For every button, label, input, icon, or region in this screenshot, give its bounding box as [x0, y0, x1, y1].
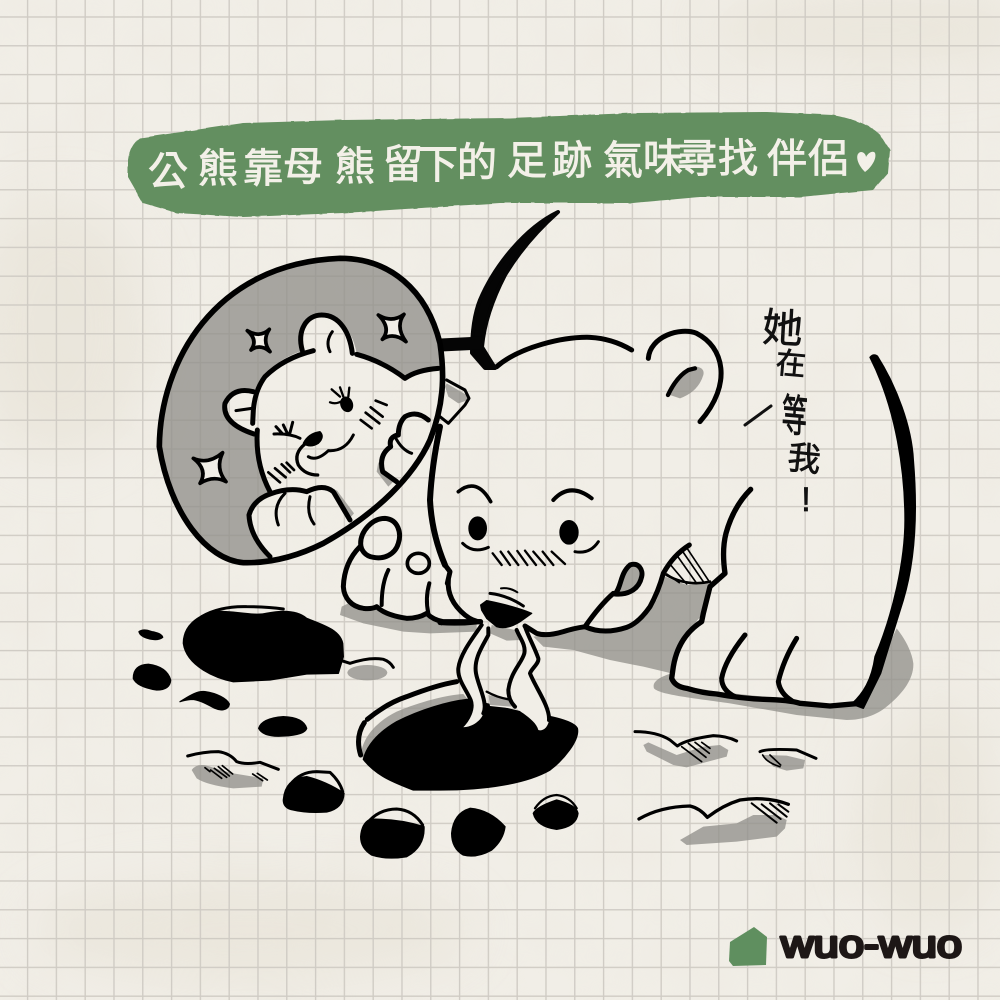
- icon: heart: [857, 152, 875, 172]
- logo wordmark: wuo-wuo: [780, 924, 962, 966]
- speech: she is waiting: 我: [786, 438, 823, 479]
- lens grey background: [159, 258, 441, 563]
- main paw pad: [183, 611, 343, 682]
- head left line: [430, 427, 440, 500]
- scent ribbons: [458, 625, 549, 730]
- logo: [729, 924, 962, 966]
- icon: sparkles: [193, 314, 406, 483]
- handle joint: [445, 383, 468, 403]
- ground mark scribbles: [635, 732, 816, 845]
- icon: green house: [729, 927, 767, 966]
- female bear head: [253, 351, 313, 423]
- shadow under front foot: [340, 603, 477, 633]
- speech dash: [745, 406, 771, 425]
- ground shadows: [533, 577, 913, 720]
- title text: 公熊靠母熊留下的足跡氣味尋找伴侶: [148, 137, 848, 194]
- lens outline: [159, 258, 443, 563]
- small ring: [407, 553, 429, 573]
- footprint trail: [133, 607, 578, 858]
- mark 2: [760, 749, 816, 771]
- magnifier handle: [441, 212, 558, 368]
- male polar bear: [430, 331, 915, 708]
- speech: she is waiting: 等: [781, 391, 808, 442]
- small paw: [615, 564, 642, 594]
- male bear front paw, foot and lower head: [343, 500, 480, 622]
- female bear face: [268, 387, 387, 482]
- big scent hole footprint: [359, 682, 578, 790]
- female bear paws: [249, 494, 270, 557]
- mark 1: [635, 732, 737, 767]
- icon: ear: [648, 331, 721, 422]
- speech: she is waiting: [745, 306, 823, 519]
- speech: she is waiting: 她: [762, 306, 804, 352]
- head lower line: [430, 500, 445, 565]
- blush hatches: [493, 551, 565, 565]
- speech exclamation: !: [801, 481, 811, 519]
- toe prints: [139, 630, 163, 640]
- hind leg: [672, 489, 860, 706]
- muzzle left line: [440, 580, 481, 623]
- foot outline: [343, 547, 480, 622]
- hatched belly patch: [667, 547, 710, 584]
- magnifier lens with female bear: [159, 258, 469, 563]
- eyes: [469, 517, 486, 540]
- shadow under nose: [490, 625, 520, 641]
- muzzle and chin: [585, 593, 613, 627]
- mark 3: [639, 799, 788, 845]
- eyebrows: [458, 486, 491, 502]
- back line: [497, 337, 632, 367]
- rump thick line: [852, 355, 915, 708]
- paw ring: [361, 518, 400, 558]
- speech: she is waiting: 在: [774, 347, 807, 382]
- nose and sniff lines: [440, 580, 532, 628]
- title banner: [128, 112, 890, 217]
